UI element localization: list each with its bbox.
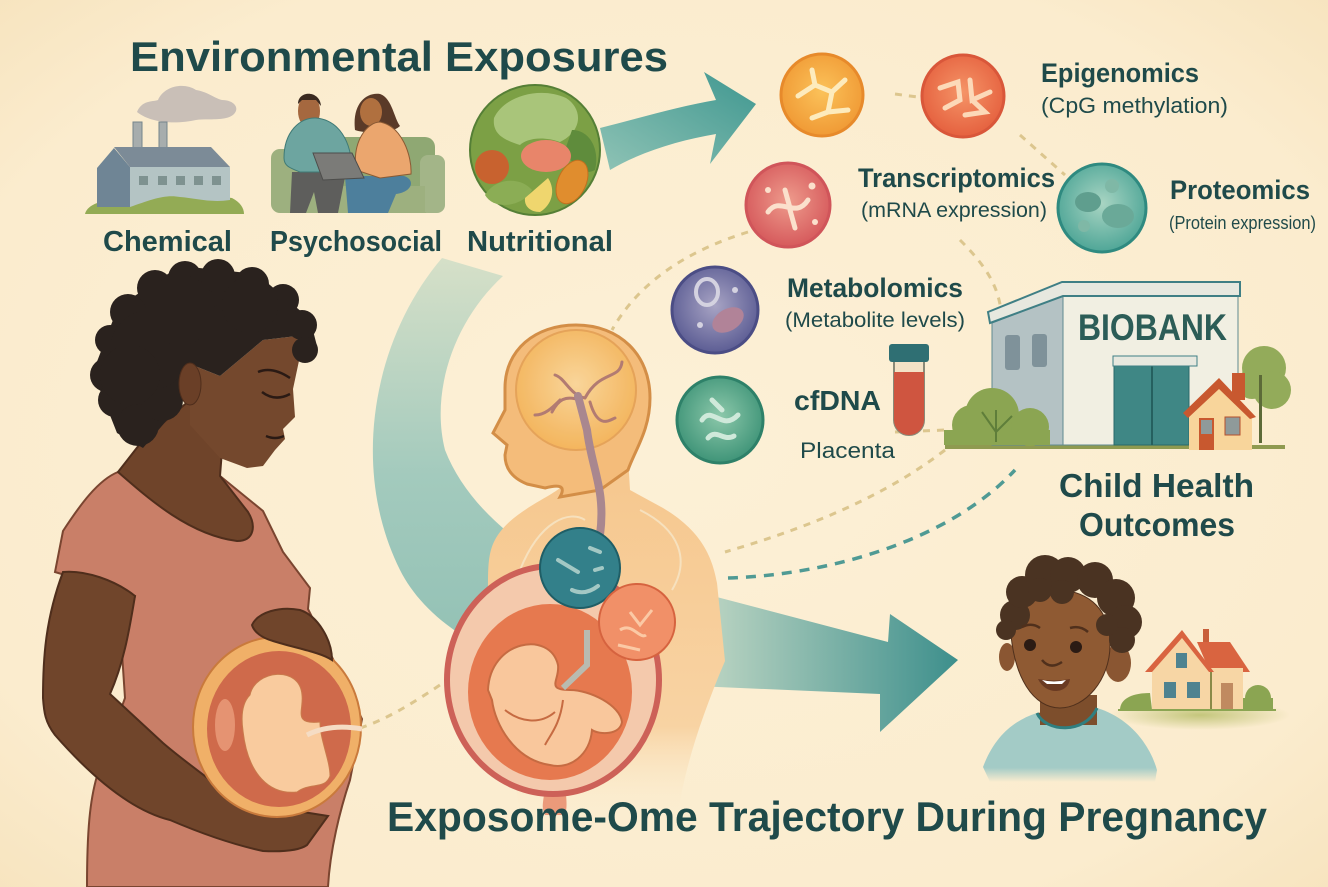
text: epigenomics: Epigenomics <box>1041 58 1199 88</box>
teal swoosh arrow to child <box>373 258 958 732</box>
text: metabolomics <box>785 273 965 332</box>
omics: transcriptomics circle <box>746 163 830 247</box>
biobank building <box>945 282 1285 449</box>
text: transcriptomics: Transcriptomics <box>858 163 1055 193</box>
icon: bush <box>944 388 1050 446</box>
child: head <box>1010 590 1110 708</box>
text: epigenomics: (CpG methylation) <box>1041 93 1228 118</box>
mother: face <box>190 336 300 468</box>
omics: cfDNA circle <box>677 377 763 463</box>
child: eyes, brows, nose and smile <box>1022 625 1088 691</box>
fetus <box>488 630 622 766</box>
mother: ear <box>179 363 201 405</box>
text: cfDNA: cfDNA <box>794 385 881 416</box>
text: proteomics: Proteomics <box>1170 175 1310 205</box>
icon: factory <box>85 86 244 214</box>
child: hair <box>996 555 1142 653</box>
mother: belly womb <box>193 637 362 817</box>
omics: proteomics circle <box>1058 164 1146 252</box>
text: transcriptomics <box>858 163 1055 222</box>
text: child health outcomes <box>1059 467 1254 543</box>
womb with fetus <box>447 528 675 815</box>
omics: orange circle <box>781 54 863 136</box>
pregnant mother <box>43 259 362 887</box>
child: shirt <box>983 708 1157 782</box>
dashed teal connector <box>728 470 1015 578</box>
child house <box>1110 629 1290 730</box>
icon: nutrition food bowl <box>470 85 600 215</box>
label: psychosocial: Psychosocial <box>270 226 442 258</box>
text: placenta: Placenta <box>800 438 896 463</box>
magnified circle: teal <box>540 528 620 608</box>
mother: neck and chest <box>118 400 253 541</box>
mother: dress <box>55 472 362 887</box>
omics: epigenomics circle <box>922 55 1004 137</box>
magnified circle: orange <box>599 584 675 660</box>
icon: small house <box>1183 373 1256 450</box>
biobank sign: BIOBANK <box>1078 307 1227 348</box>
text: child health outcomes: Child Health <box>1059 467 1254 504</box>
child: ears <box>1105 644 1131 682</box>
dotted connectors <box>360 94 1065 728</box>
child <box>983 555 1157 782</box>
main bottom title: Exposome-Ome Trajectory During Pregnancy <box>387 793 1268 840</box>
omics: metabolomics circle <box>672 267 758 353</box>
mother: upper hand on belly <box>252 609 332 660</box>
title: environmental exposures: Environmental Exposures <box>130 33 668 80</box>
text: metabolomics: (Metabolite levels) <box>785 309 965 332</box>
icon: blood test tube <box>889 344 929 435</box>
label: nutritional: Nutritional <box>467 226 613 258</box>
mother: hair <box>90 259 318 448</box>
text: metabolomics: Metabolomics <box>787 273 963 303</box>
label: chemical: Chemical <box>103 226 232 258</box>
mother: arm <box>43 572 328 851</box>
icon: tree <box>1237 346 1291 443</box>
text: proteomics: (Protein expression) <box>1169 213 1316 233</box>
icon: couple on sofa <box>271 94 445 213</box>
text: epigenomics <box>1041 58 1228 118</box>
text: transcriptomics: (mRNA expression) <box>861 199 1047 222</box>
center body figure <box>488 325 725 815</box>
mother: brow, closed eye and lips <box>258 370 290 438</box>
text: child health outcomes: Outcomes <box>1079 506 1235 543</box>
arrow: exposures to omics <box>600 72 756 170</box>
text: proteomics <box>1169 175 1316 233</box>
